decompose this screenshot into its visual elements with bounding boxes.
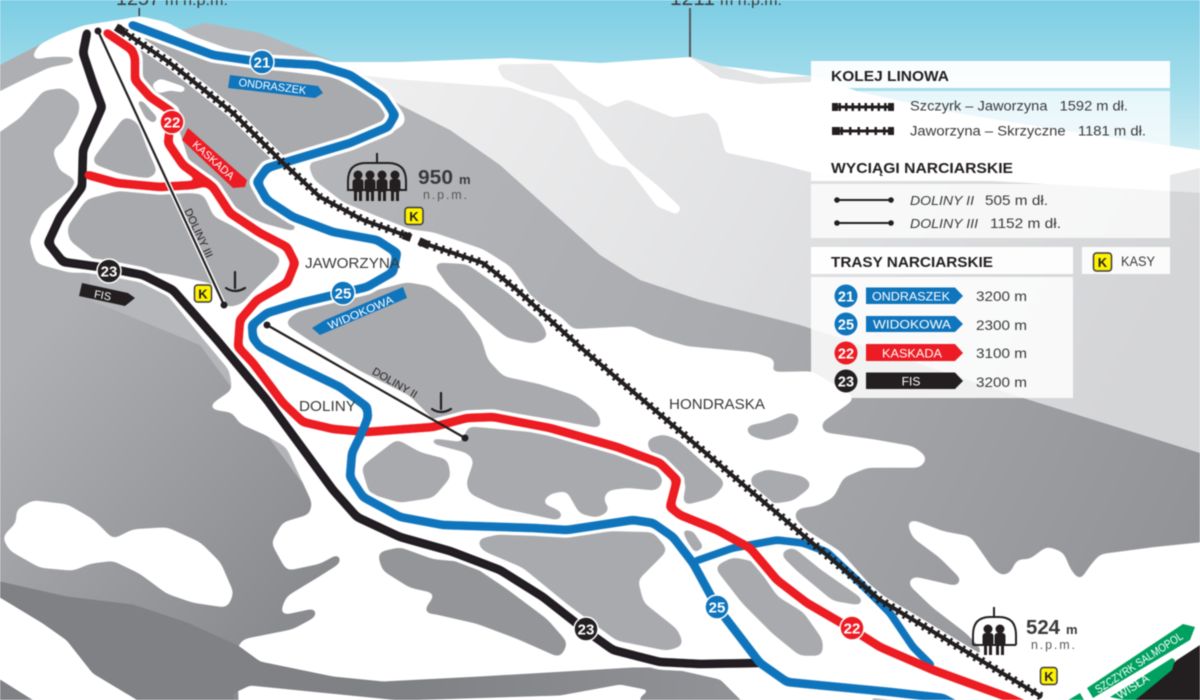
altitude label: 950: n.p.m. bbox=[423, 188, 467, 202]
legend panel: ski lifts: DOLINY III bbox=[910, 216, 978, 231]
legend row: Widokowa: 25 bbox=[838, 318, 854, 334]
legend panel: cable car: KOLEJ LINOWA bbox=[831, 68, 949, 85]
legend row: Ondraszek: 3200 m bbox=[976, 288, 1027, 304]
icon: four-seat chairlift bbox=[348, 153, 406, 201]
legend row: FIS: 3200 m bbox=[976, 374, 1027, 390]
road sign: Wisła bbox=[1110, 658, 1175, 700]
legend row: Widokowa bbox=[834, 312, 1027, 336]
sign: Kaskada: KASKADA bbox=[190, 139, 237, 183]
small terrain details bbox=[137, 79, 703, 552]
legend panel: cable car: Szczyrk – Jaworzyna 1592 m dł. bbox=[910, 98, 1128, 114]
piste 25/21 branch bbox=[693, 540, 933, 667]
place names: DOLINY bbox=[299, 398, 356, 415]
black road corner bbox=[1133, 645, 1200, 700]
grey terrain patches bbox=[68, 36, 863, 657]
altitude label: 524: m bbox=[1066, 622, 1078, 637]
ticket office marker bbox=[194, 285, 212, 302]
piste 21 and 25 bbox=[132, 25, 961, 700]
road sign: Szczyrk Salmopol: SZCZYRK SALMOPOL bbox=[1093, 630, 1186, 696]
legend panel: cable car: Jaworzyna – Skrzyczne 1181 m dł. bbox=[910, 124, 1146, 138]
legend panel: ski lifts: 505 m dł. bbox=[985, 193, 1048, 208]
legend panel: cable car bbox=[811, 61, 1170, 146]
piste number badges: 21 bbox=[254, 54, 270, 72]
sign: FIS bbox=[79, 283, 135, 306]
altitude label: 950 bbox=[418, 167, 471, 202]
ticket office marker bbox=[405, 208, 423, 224]
legend panel: ticket office: K bbox=[1098, 255, 1108, 270]
piste 23 FIS bbox=[48, 33, 760, 664]
piste 22 Kaskada bbox=[88, 33, 1040, 700]
legend panel: ski lifts: 1152 m dł. bbox=[990, 216, 1061, 231]
legend panel: ski lifts: WYCIĄGI NARCIARSKIE bbox=[831, 160, 1013, 177]
altitude label: 524 bbox=[1026, 617, 1078, 652]
place names: HONDRASKA bbox=[669, 396, 765, 413]
legend row: Ondraszek bbox=[834, 284, 1027, 308]
legend row: FIS: 23 bbox=[838, 374, 854, 390]
lift Doliny III: DOLINY III bbox=[181, 207, 215, 260]
sign: Ondraszek bbox=[228, 75, 323, 98]
piste number badges: 22 bbox=[164, 114, 180, 132]
piste number badges: 25 bbox=[709, 600, 725, 616]
road sign stub bbox=[1060, 693, 1084, 700]
ticket office marker bbox=[1040, 668, 1057, 684]
legend panel: ski runs: TRASY NARCIARSKIE bbox=[831, 254, 993, 271]
piste number badges: 25 bbox=[335, 286, 351, 302]
legend row: Kaskada: 3100 m bbox=[976, 345, 1027, 361]
distant snowy ridge bbox=[330, 57, 1200, 460]
ticket office marker: K bbox=[198, 286, 208, 302]
cable car casing bbox=[118, 28, 1042, 697]
legend panel: ski lifts bbox=[811, 154, 1170, 238]
legend row: Widokowa: 2300 m bbox=[976, 317, 1027, 333]
lift Doliny II bbox=[264, 322, 468, 442]
dark foreground band bbox=[0, 578, 918, 700]
place names: JAWORZYNA bbox=[305, 255, 400, 272]
legend row: FIS bbox=[834, 370, 1027, 392]
piste number badges bbox=[97, 50, 864, 641]
sign: FIS: FIS bbox=[93, 289, 112, 303]
piste number badges: 23 bbox=[578, 622, 594, 638]
altitude label: 524: 524 bbox=[1026, 617, 1061, 639]
legend panel: ski lifts: DOLINY II bbox=[910, 193, 974, 208]
legend row: Ondraszek: 21 bbox=[838, 290, 854, 306]
icon: T-bar bbox=[226, 272, 245, 291]
legend row: Kaskada bbox=[834, 342, 1027, 364]
sign: Kaskada bbox=[182, 128, 247, 188]
sky bbox=[0, 0, 1200, 200]
altitude label: 950: m bbox=[459, 172, 471, 187]
legend row: Kaskada: 22 bbox=[838, 346, 854, 362]
piste number badges: 22 bbox=[844, 620, 860, 638]
legend row: Ondraszek: ONDRASZEK bbox=[872, 290, 950, 304]
summit label: 1257 bbox=[116, 0, 228, 16]
altitude label: 524: n.p.m. bbox=[1031, 638, 1075, 652]
summit label: 1211 bbox=[670, 0, 782, 57]
lift Doliny III bbox=[94, 28, 228, 308]
piste number badges: 23 bbox=[101, 264, 117, 280]
legend panel: ticket office: KASY bbox=[1121, 254, 1155, 269]
sign: Widokowa: WIDOKOWA bbox=[326, 294, 396, 332]
legend row: Widokowa: WIDOKOWA bbox=[873, 318, 951, 332]
legend panel: ski runs bbox=[811, 247, 1073, 398]
legend row: Kaskada: KASKADA bbox=[882, 346, 942, 360]
legend panel: ticket office bbox=[1082, 247, 1170, 274]
sign: Ondraszek: ONDRASZEK bbox=[238, 77, 307, 97]
sign: Widokowa bbox=[312, 287, 407, 335]
ticket office marker: K bbox=[409, 209, 419, 224]
place names bbox=[299, 255, 765, 415]
altitude label: 950: 950 bbox=[418, 167, 453, 189]
icon: T-bar bbox=[432, 393, 451, 412]
piste casings bbox=[48, 25, 1040, 700]
lift Doliny II: DOLINY II bbox=[370, 366, 419, 401]
ticket office marker: K bbox=[1044, 669, 1054, 684]
cable car line bbox=[116, 27, 1042, 697]
icon: two-seat chairlift bbox=[973, 607, 1016, 655]
legend row: FIS: FIS bbox=[902, 374, 920, 388]
